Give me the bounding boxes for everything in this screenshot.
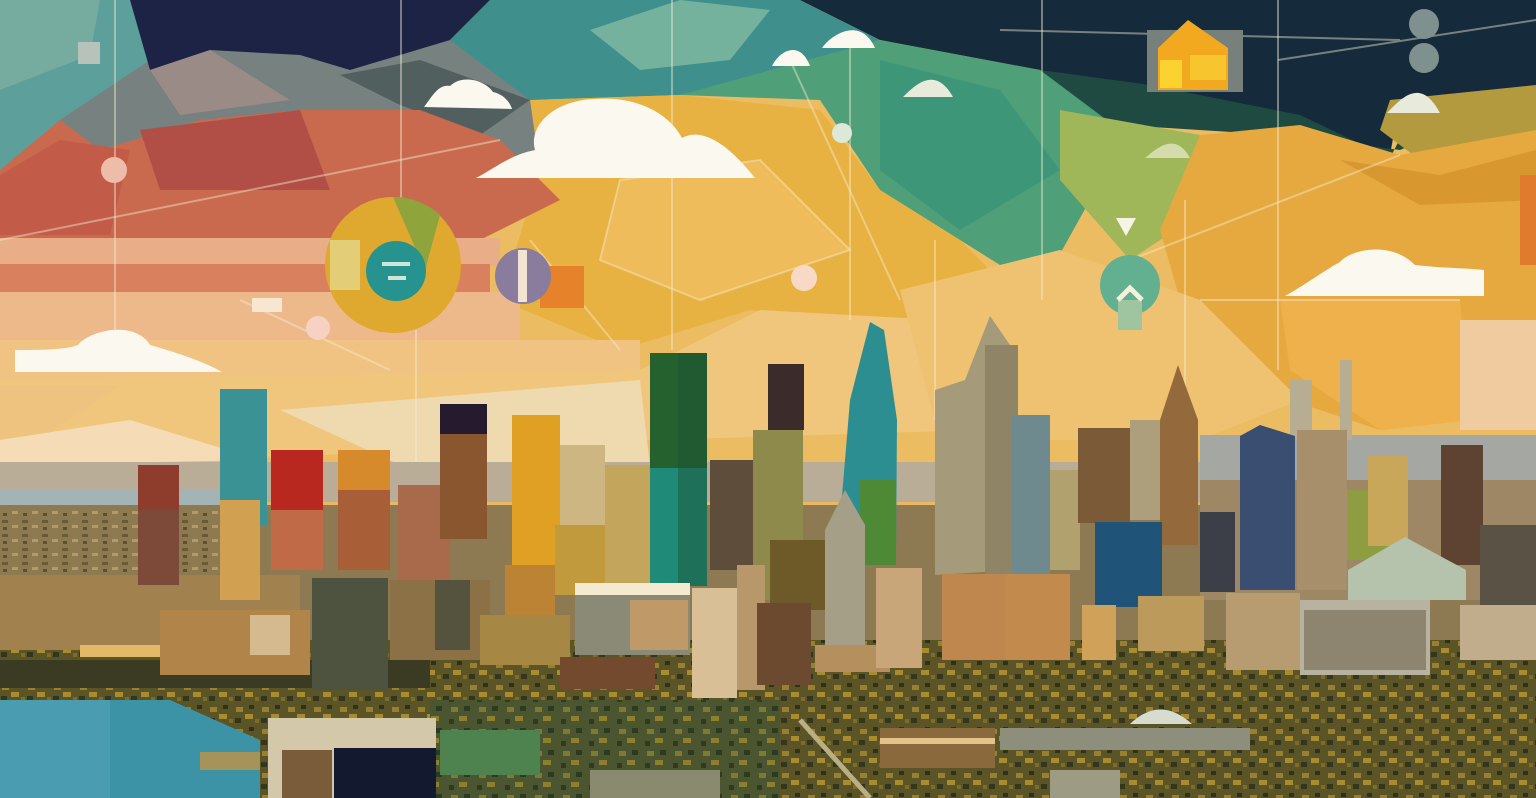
- icon: network dots top right: [1409, 9, 1439, 73]
- center buildings: [710, 316, 1536, 645]
- icon: purple circle with bulb: [495, 248, 584, 308]
- icon: teal circle with gold ring: [325, 197, 461, 333]
- small pin icons: [78, 42, 852, 340]
- cloud: top right: [1387, 93, 1440, 113]
- buildings left: [138, 389, 650, 690]
- foreground bottom elements: [268, 710, 1250, 798]
- water: [0, 700, 260, 798]
- green tower: [650, 353, 707, 586]
- icon: green circle: [1100, 218, 1160, 330]
- clouds: [15, 30, 1484, 372]
- cloud: upper center large: [476, 99, 755, 178]
- cloud: right: [1285, 250, 1484, 296]
- sky base: [0, 0, 1536, 480]
- cloud: lower left: [15, 330, 222, 372]
- cloud: upper left small: [424, 79, 512, 109]
- cloud: top center: [822, 30, 875, 48]
- distant skyline and horizon: [0, 360, 1536, 665]
- cloud: top small: [772, 50, 810, 66]
- icon: house: [1147, 20, 1243, 92]
- cloud: small sky: [903, 80, 953, 97]
- cloud: faint green area: [1145, 144, 1190, 158]
- foreground low buildings: [560, 537, 1536, 698]
- ground and park: [0, 575, 1536, 798]
